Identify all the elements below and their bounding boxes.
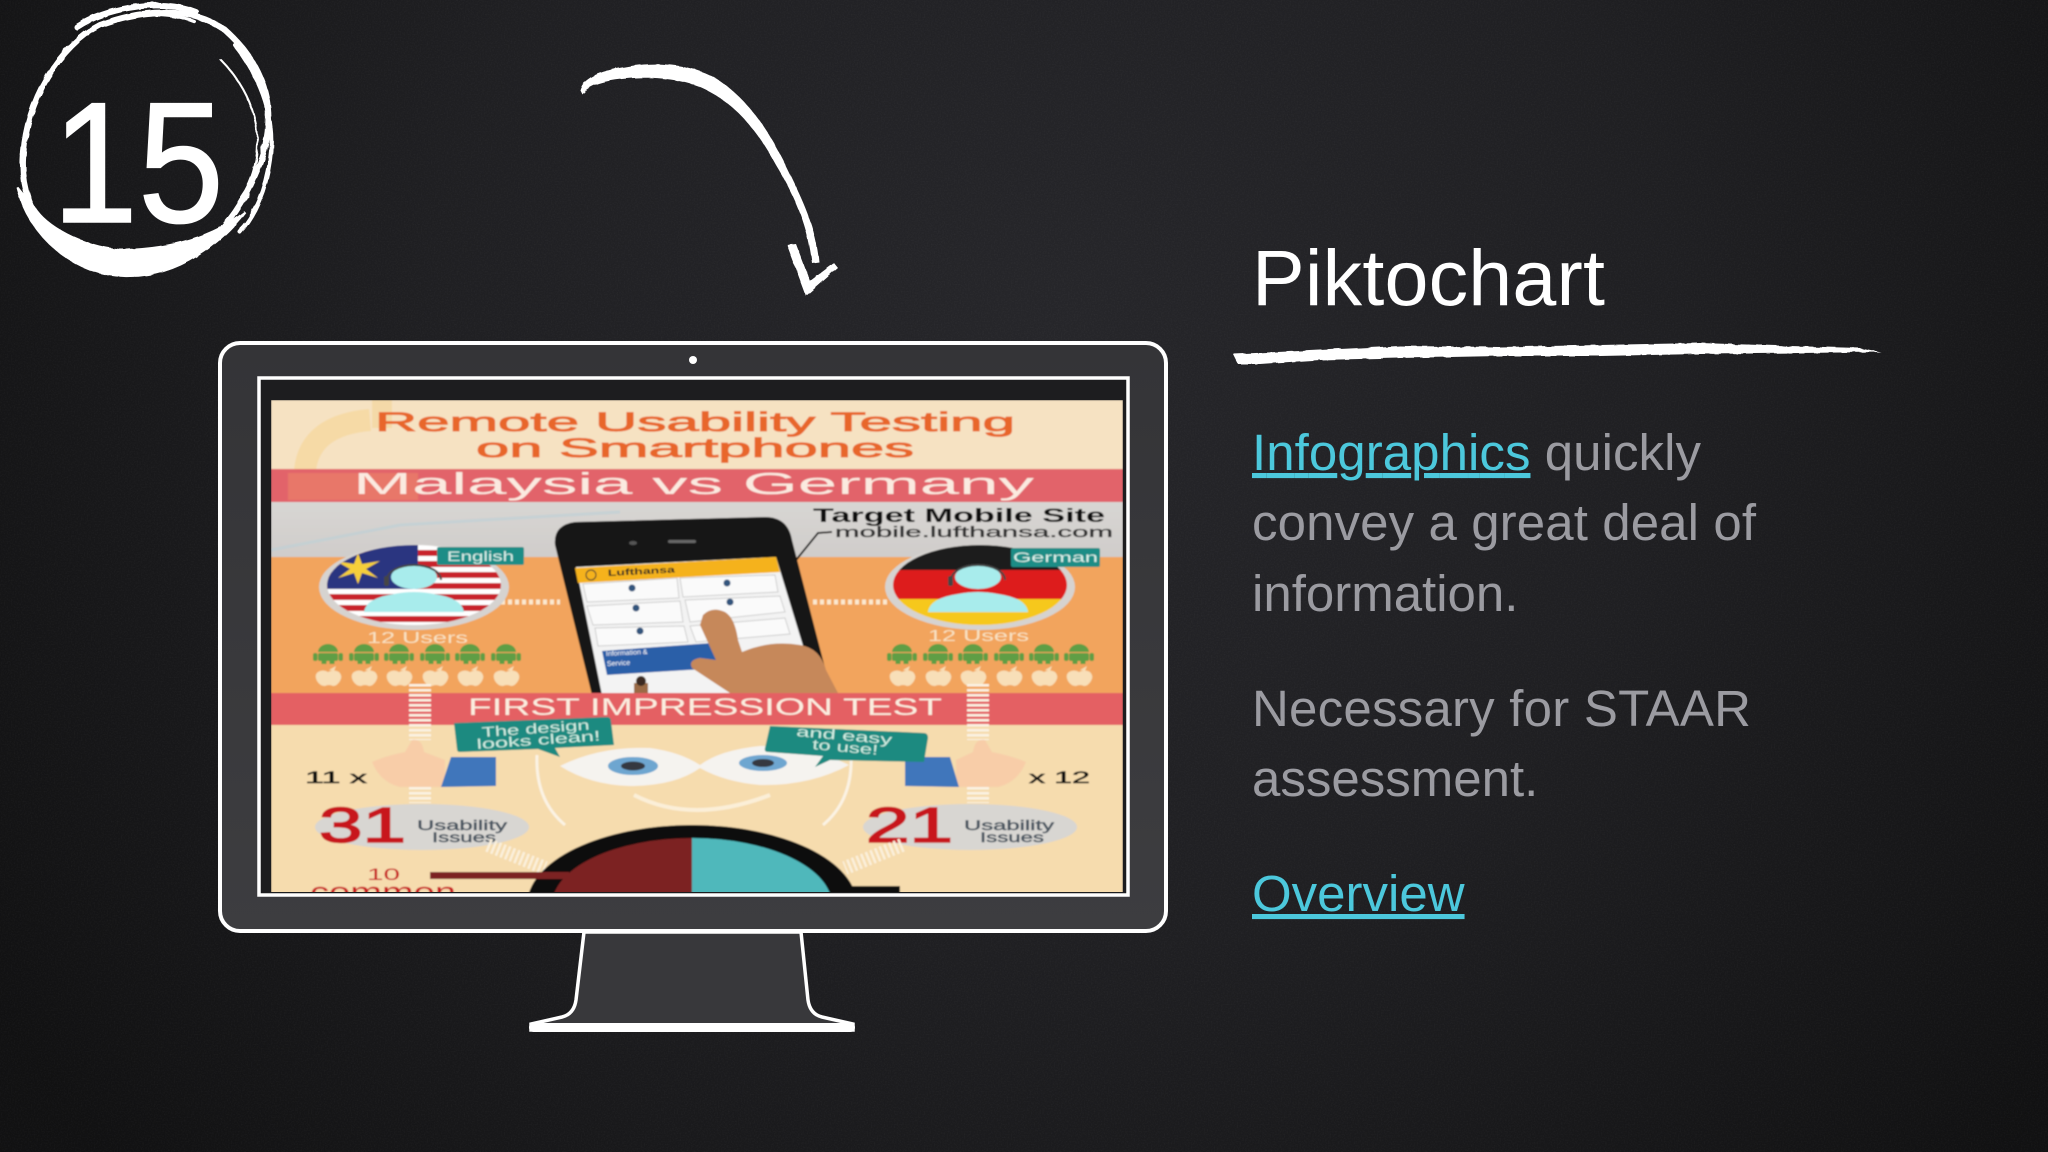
chalk underline xyxy=(1233,343,1881,364)
line: convey a great deal of: convey a great deal of xyxy=(1252,494,1757,551)
screen frame xyxy=(259,378,1128,895)
Germany user badge: German xyxy=(1013,549,1098,565)
common issues label xyxy=(310,865,569,907)
android icon rows xyxy=(313,644,1094,664)
thumbs-up hand left xyxy=(372,740,496,787)
speech bubble left: looks clean! xyxy=(476,727,601,752)
speech bubble left xyxy=(454,716,614,757)
band: First impression test: FIRST IMPRESSION TEST xyxy=(468,694,943,721)
usability issues right: Usability xyxy=(964,817,1054,833)
common issues label: common xyxy=(310,877,456,907)
smartphone: Lufthansa xyxy=(608,564,677,578)
stripe pillars xyxy=(420,684,978,803)
speech bubble right: to use! xyxy=(812,736,879,758)
monitor bezel xyxy=(220,343,1166,931)
thumbs-up hand right xyxy=(905,740,1026,787)
target site label: mobile.lufthansa.com xyxy=(835,525,1113,541)
smartphone: Information & xyxy=(606,649,648,658)
monitor stand xyxy=(529,932,855,1032)
number 15: 15 xyxy=(52,67,224,259)
target site label: Target Mobile Site xyxy=(813,506,1105,527)
speech bubble left: The design xyxy=(481,716,590,740)
arrow: chalk curve pointing at monitor xyxy=(580,64,838,296)
heading: Piktochart: Piktochart xyxy=(1252,233,1605,322)
dotted connectors xyxy=(501,600,888,604)
smartphone: Service xyxy=(607,660,631,668)
band: First impression test xyxy=(271,693,1123,725)
Malaysia user badge: English xyxy=(447,548,514,564)
Germany user badge xyxy=(885,544,1100,630)
usability issues left xyxy=(314,804,530,850)
diagonal stripes xyxy=(488,845,902,868)
body text xyxy=(1252,424,1757,922)
apple icon rows xyxy=(316,666,1092,686)
usability issues right xyxy=(863,799,1077,853)
speech bubble right xyxy=(765,723,928,767)
face drawing xyxy=(537,746,851,825)
line: assessment.: assessment. xyxy=(1252,750,1538,807)
infographic title panel xyxy=(271,400,1123,470)
usability issues right: Issues xyxy=(980,829,1044,845)
magnifier xyxy=(527,825,900,985)
camera dot xyxy=(689,356,697,364)
link: Overview: Overview xyxy=(1252,865,1465,922)
line: information.: information. xyxy=(1252,565,1518,622)
user counts: 12 Users xyxy=(928,628,1029,645)
line: Infographics quickly: Infographics quickly xyxy=(1252,424,1702,481)
infographic title panel: on Smartphones xyxy=(476,433,914,463)
usability issues left: Usability xyxy=(417,817,507,833)
smartphone xyxy=(555,517,838,695)
band: Malaysia vs Germany: Malaysia vs Germany xyxy=(353,466,1035,501)
user counts xyxy=(368,629,1029,644)
user counts: 12 Users xyxy=(367,630,468,647)
multiplier labels xyxy=(306,770,1090,784)
monitor xyxy=(220,343,1166,1032)
screen: embedded infographic xyxy=(271,400,1123,892)
multiplier labels: 11 x xyxy=(305,768,368,787)
band: Malaysia vs Germany xyxy=(271,466,1123,502)
line: Necessary for STAAR: Necessary for STAAR xyxy=(1252,680,1751,737)
usability issues right: 21 xyxy=(866,799,953,853)
common issues label: 10 xyxy=(367,865,400,884)
step number in chalk circle xyxy=(17,5,271,276)
multiplier labels: x 12 xyxy=(1029,768,1090,787)
speech bubble right: and easy xyxy=(796,723,893,747)
gray and orange section xyxy=(271,502,1123,693)
lower cream section xyxy=(271,725,1123,895)
usability issues left: Issues xyxy=(432,829,496,845)
Malaysia user badge xyxy=(319,544,524,630)
infographic title panel: Remote Usability Testing xyxy=(375,407,1015,437)
usability issues left: 31 xyxy=(319,799,406,853)
target site label xyxy=(792,506,1113,565)
